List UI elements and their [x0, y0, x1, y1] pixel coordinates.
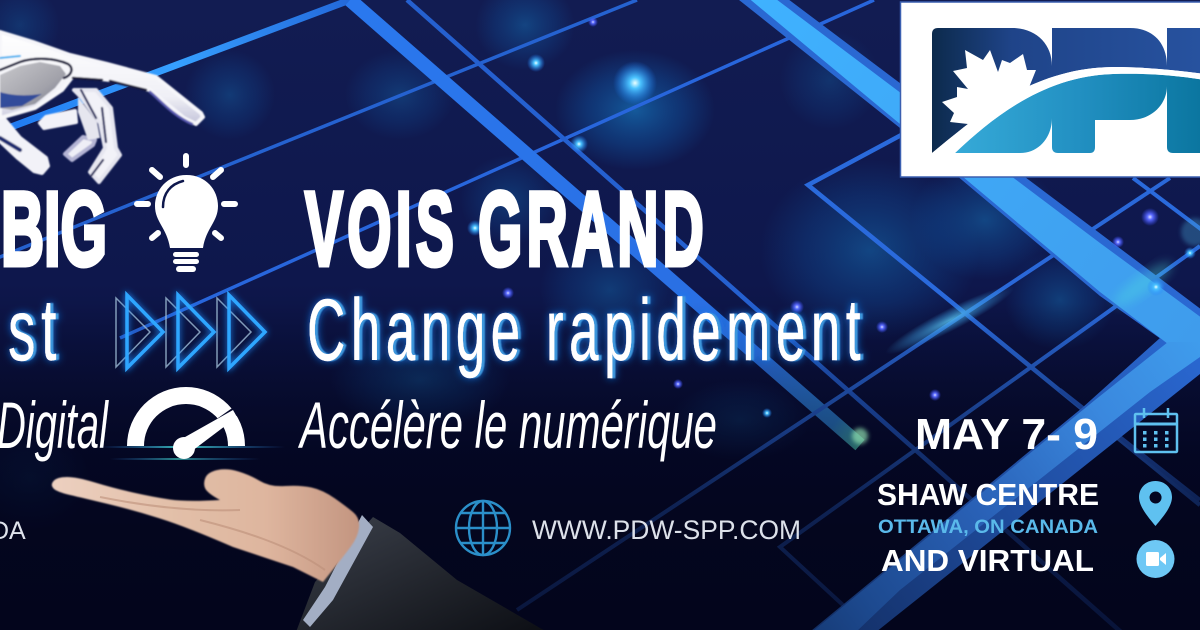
business hand [52, 469, 547, 630]
robot hand: finger shadow [150, 92, 192, 124]
robot hand: thumb detail [0, 138, 20, 150]
robot hand: palm [0, 62, 66, 110]
robot hand: finger joints [78, 97, 100, 140]
robot hand: middle finger [65, 137, 95, 160]
thick chevron band [734, 0, 1200, 630]
shirt cuff [303, 515, 373, 627]
robot hand [0, 32, 203, 182]
palm creases [100, 497, 325, 570]
website: WWW.PDW-SPP.COM [532, 515, 801, 545]
heading fragment: BIG: BIG [1, 171, 107, 288]
venue: SHAW CENTRE [877, 477, 1099, 512]
robot hand: cyan stripe [0, 56, 20, 58]
robot hand: small finger [40, 111, 76, 128]
subheading fragment: st: st [8, 282, 62, 379]
robot hand: arm and index finger [0, 32, 203, 124]
glowing particles [467, 17, 1200, 444]
city: OTTAWA, ON CANADA [878, 516, 1098, 538]
heading: VOIS GRAND: VOIS GRAND [305, 171, 708, 288]
subheading: Change rapidement: Change rapidement [307, 282, 866, 379]
icon: globe [456, 501, 510, 555]
tagline fragment: Digital: Digital [0, 388, 109, 462]
robot hand: long finger [74, 90, 120, 182]
suit sleeve [296, 517, 547, 630]
date: MAY 7- 9 [915, 410, 1098, 459]
icon: fast-forward arrows [116, 295, 265, 368]
icon: map pin [1139, 481, 1172, 526]
robot hand: palm shadow [0, 92, 42, 108]
logo panel [900, 2, 1200, 177]
robot hand: finger detail [81, 90, 106, 176]
robot hand: thumb [0, 114, 48, 173]
palm [52, 469, 359, 582]
icon: light bulb [137, 156, 235, 272]
virtual: AND VIRTUAL [881, 543, 1094, 578]
robot hand: outline details [0, 59, 146, 90]
icon: maple leaf [942, 50, 1036, 124]
icon: video camera [1136, 540, 1174, 578]
icon: calendar [1135, 408, 1177, 452]
icon: speedometer [100, 387, 285, 460]
tagline: Accélère le numérique: Accélère le numérique [297, 388, 717, 462]
